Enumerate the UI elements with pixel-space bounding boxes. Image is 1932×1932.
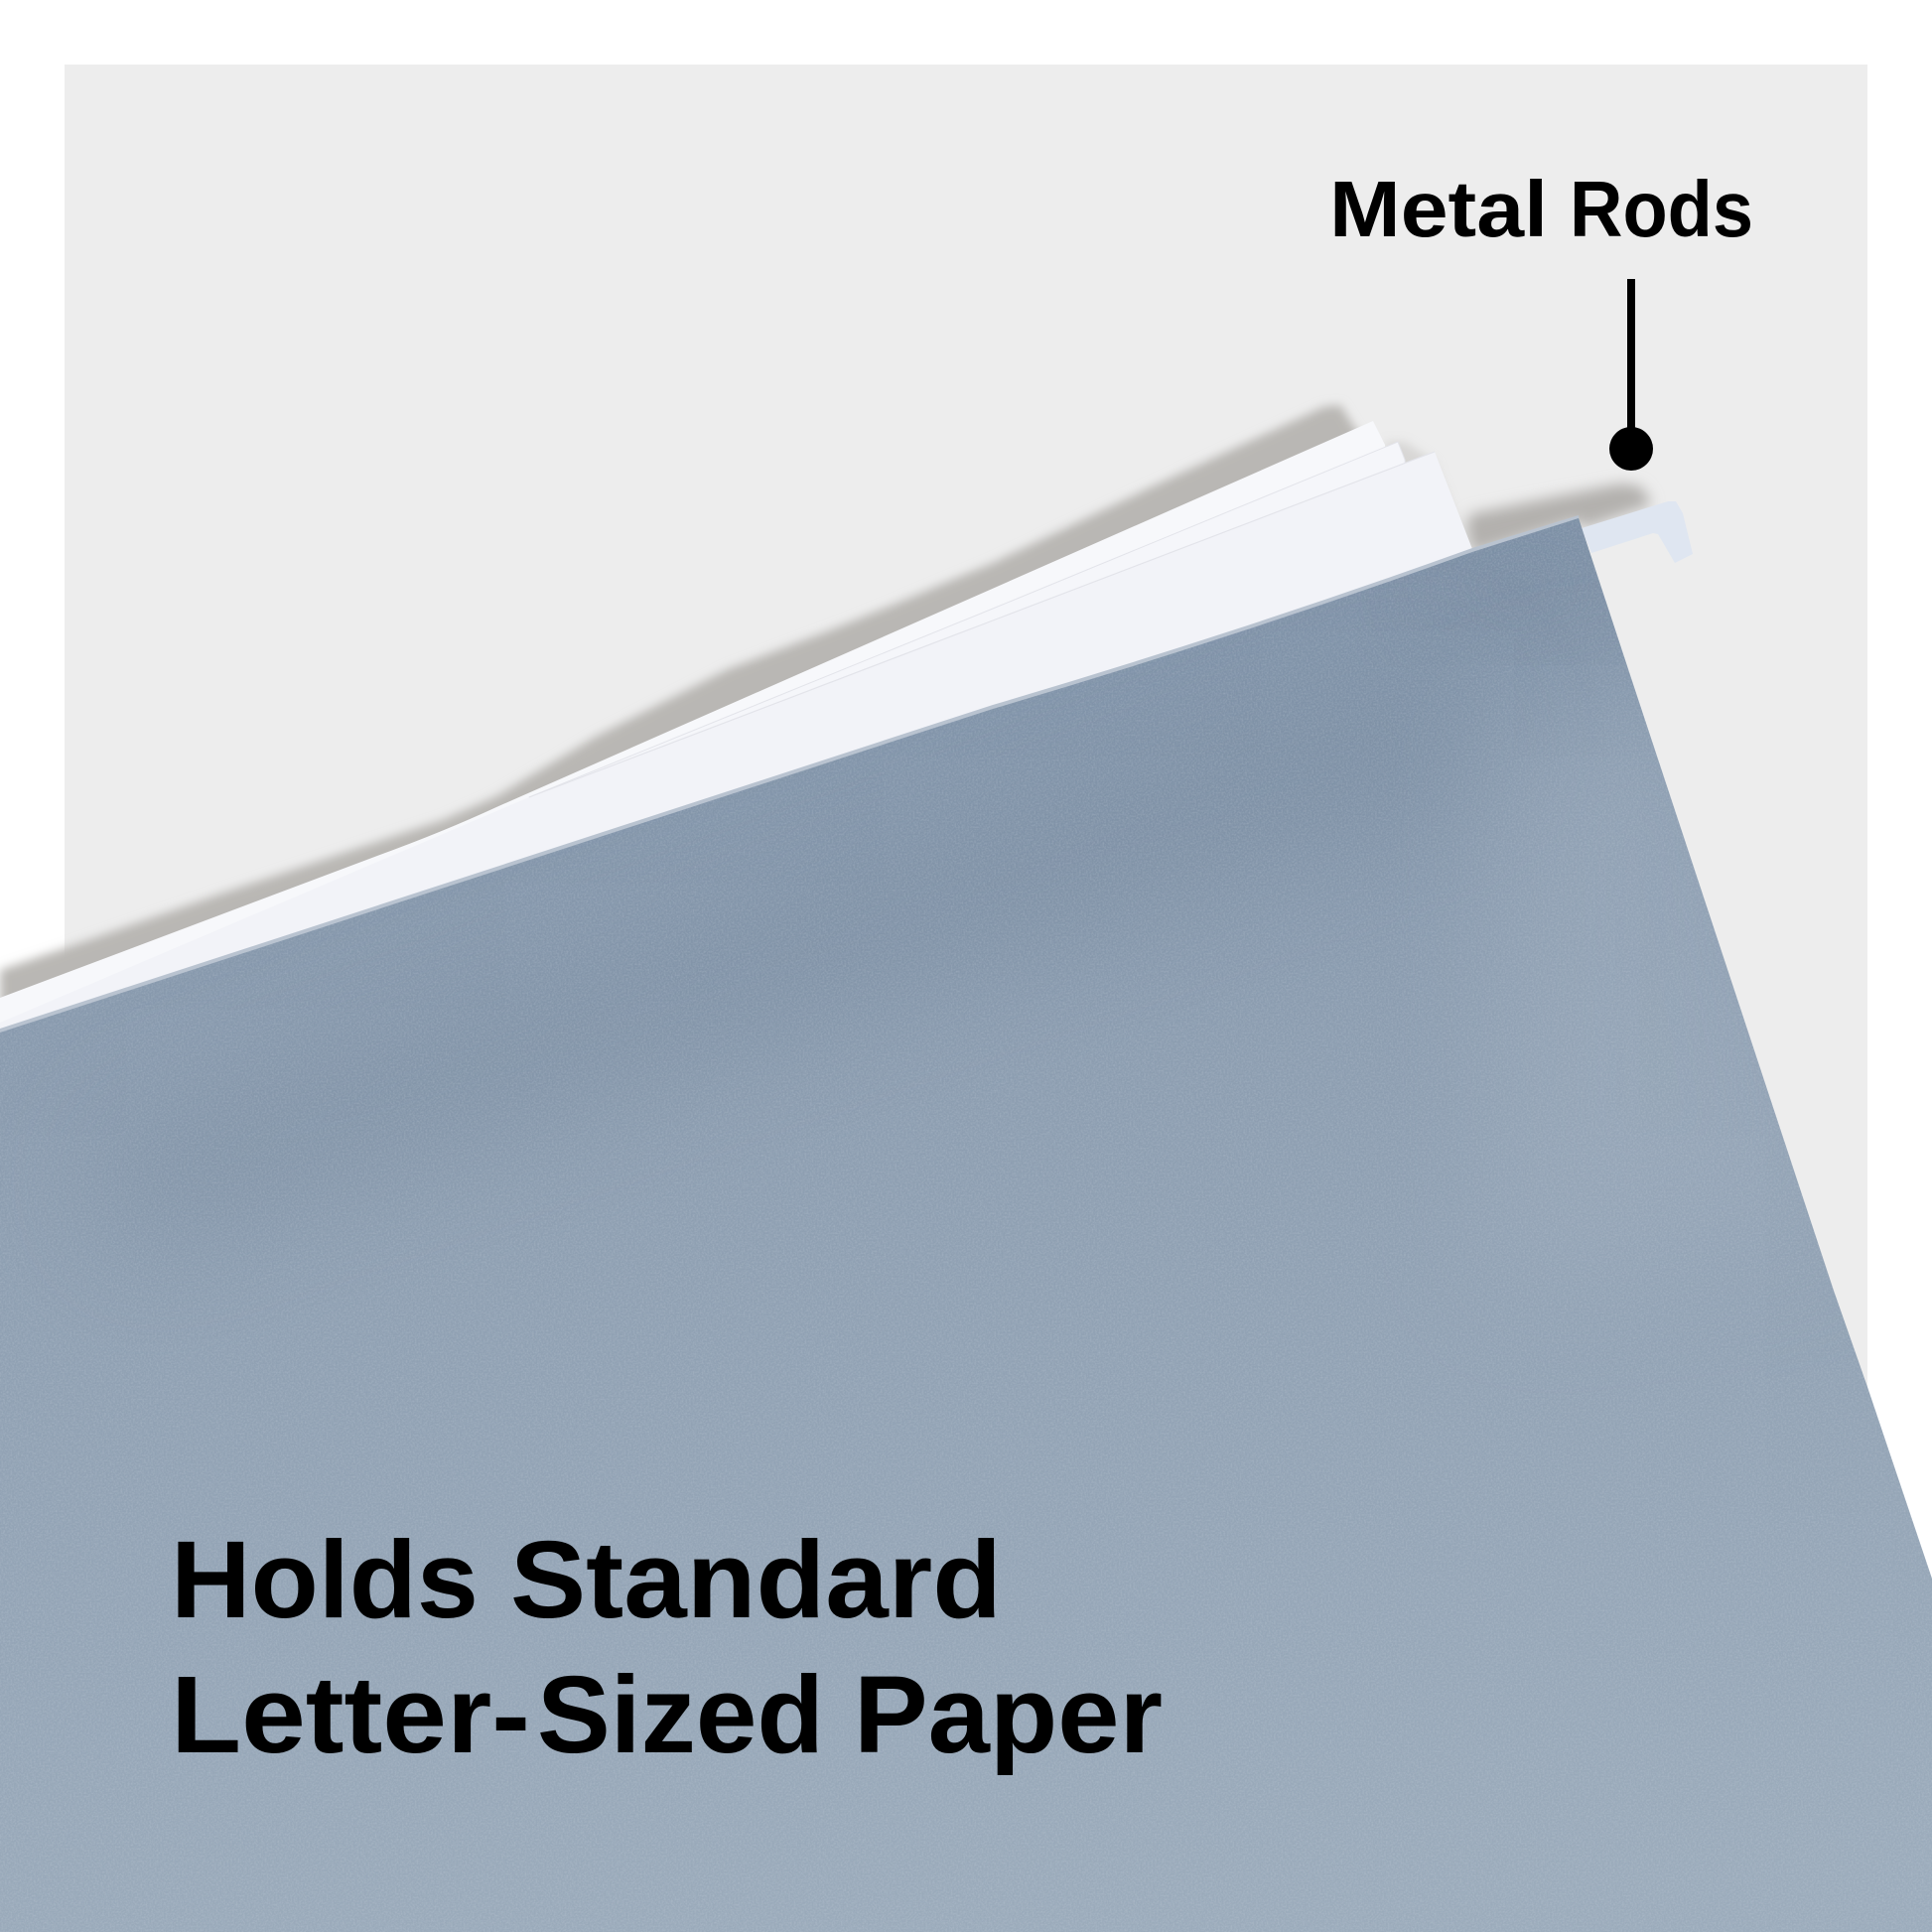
callout: metal rods bbox=[1329, 165, 1753, 471]
shadow: paper stack bbox=[0, 405, 1390, 1033]
label: metal rods: Rods bbox=[1570, 165, 1753, 253]
paper sheet: middle bbox=[516, 442, 1415, 854]
folder edge highlight bbox=[0, 515, 1580, 1036]
paper sheet: front edge line bbox=[529, 452, 1435, 797]
leader line with dot bbox=[1609, 279, 1653, 471]
shadow: paper sheet edges bbox=[1385, 442, 1469, 556]
heading: Sized bbox=[537, 1654, 824, 1776]
heading: Paper bbox=[854, 1654, 1163, 1776]
panel: grey background bbox=[65, 65, 1867, 1395]
icon: metal rod hook bbox=[1582, 501, 1693, 563]
paper sheet: back bbox=[0, 421, 1390, 1033]
label: metal rods: Metal bbox=[1329, 165, 1548, 253]
paper stack bbox=[0, 421, 1479, 1038]
folder shading bbox=[0, 496, 1932, 1932]
label: metal rods bbox=[1329, 165, 1753, 253]
heading: Holds bbox=[171, 1519, 479, 1641]
hanging folder bbox=[0, 496, 1932, 1932]
heading: Standard bbox=[510, 1519, 1002, 1641]
paper sheet: front bbox=[0, 452, 1479, 1038]
heading bbox=[171, 1519, 1163, 1776]
folder body bbox=[0, 518, 1932, 1932]
heading: Letter- bbox=[171, 1654, 530, 1776]
shadow: metal rod bbox=[1466, 483, 1652, 554]
